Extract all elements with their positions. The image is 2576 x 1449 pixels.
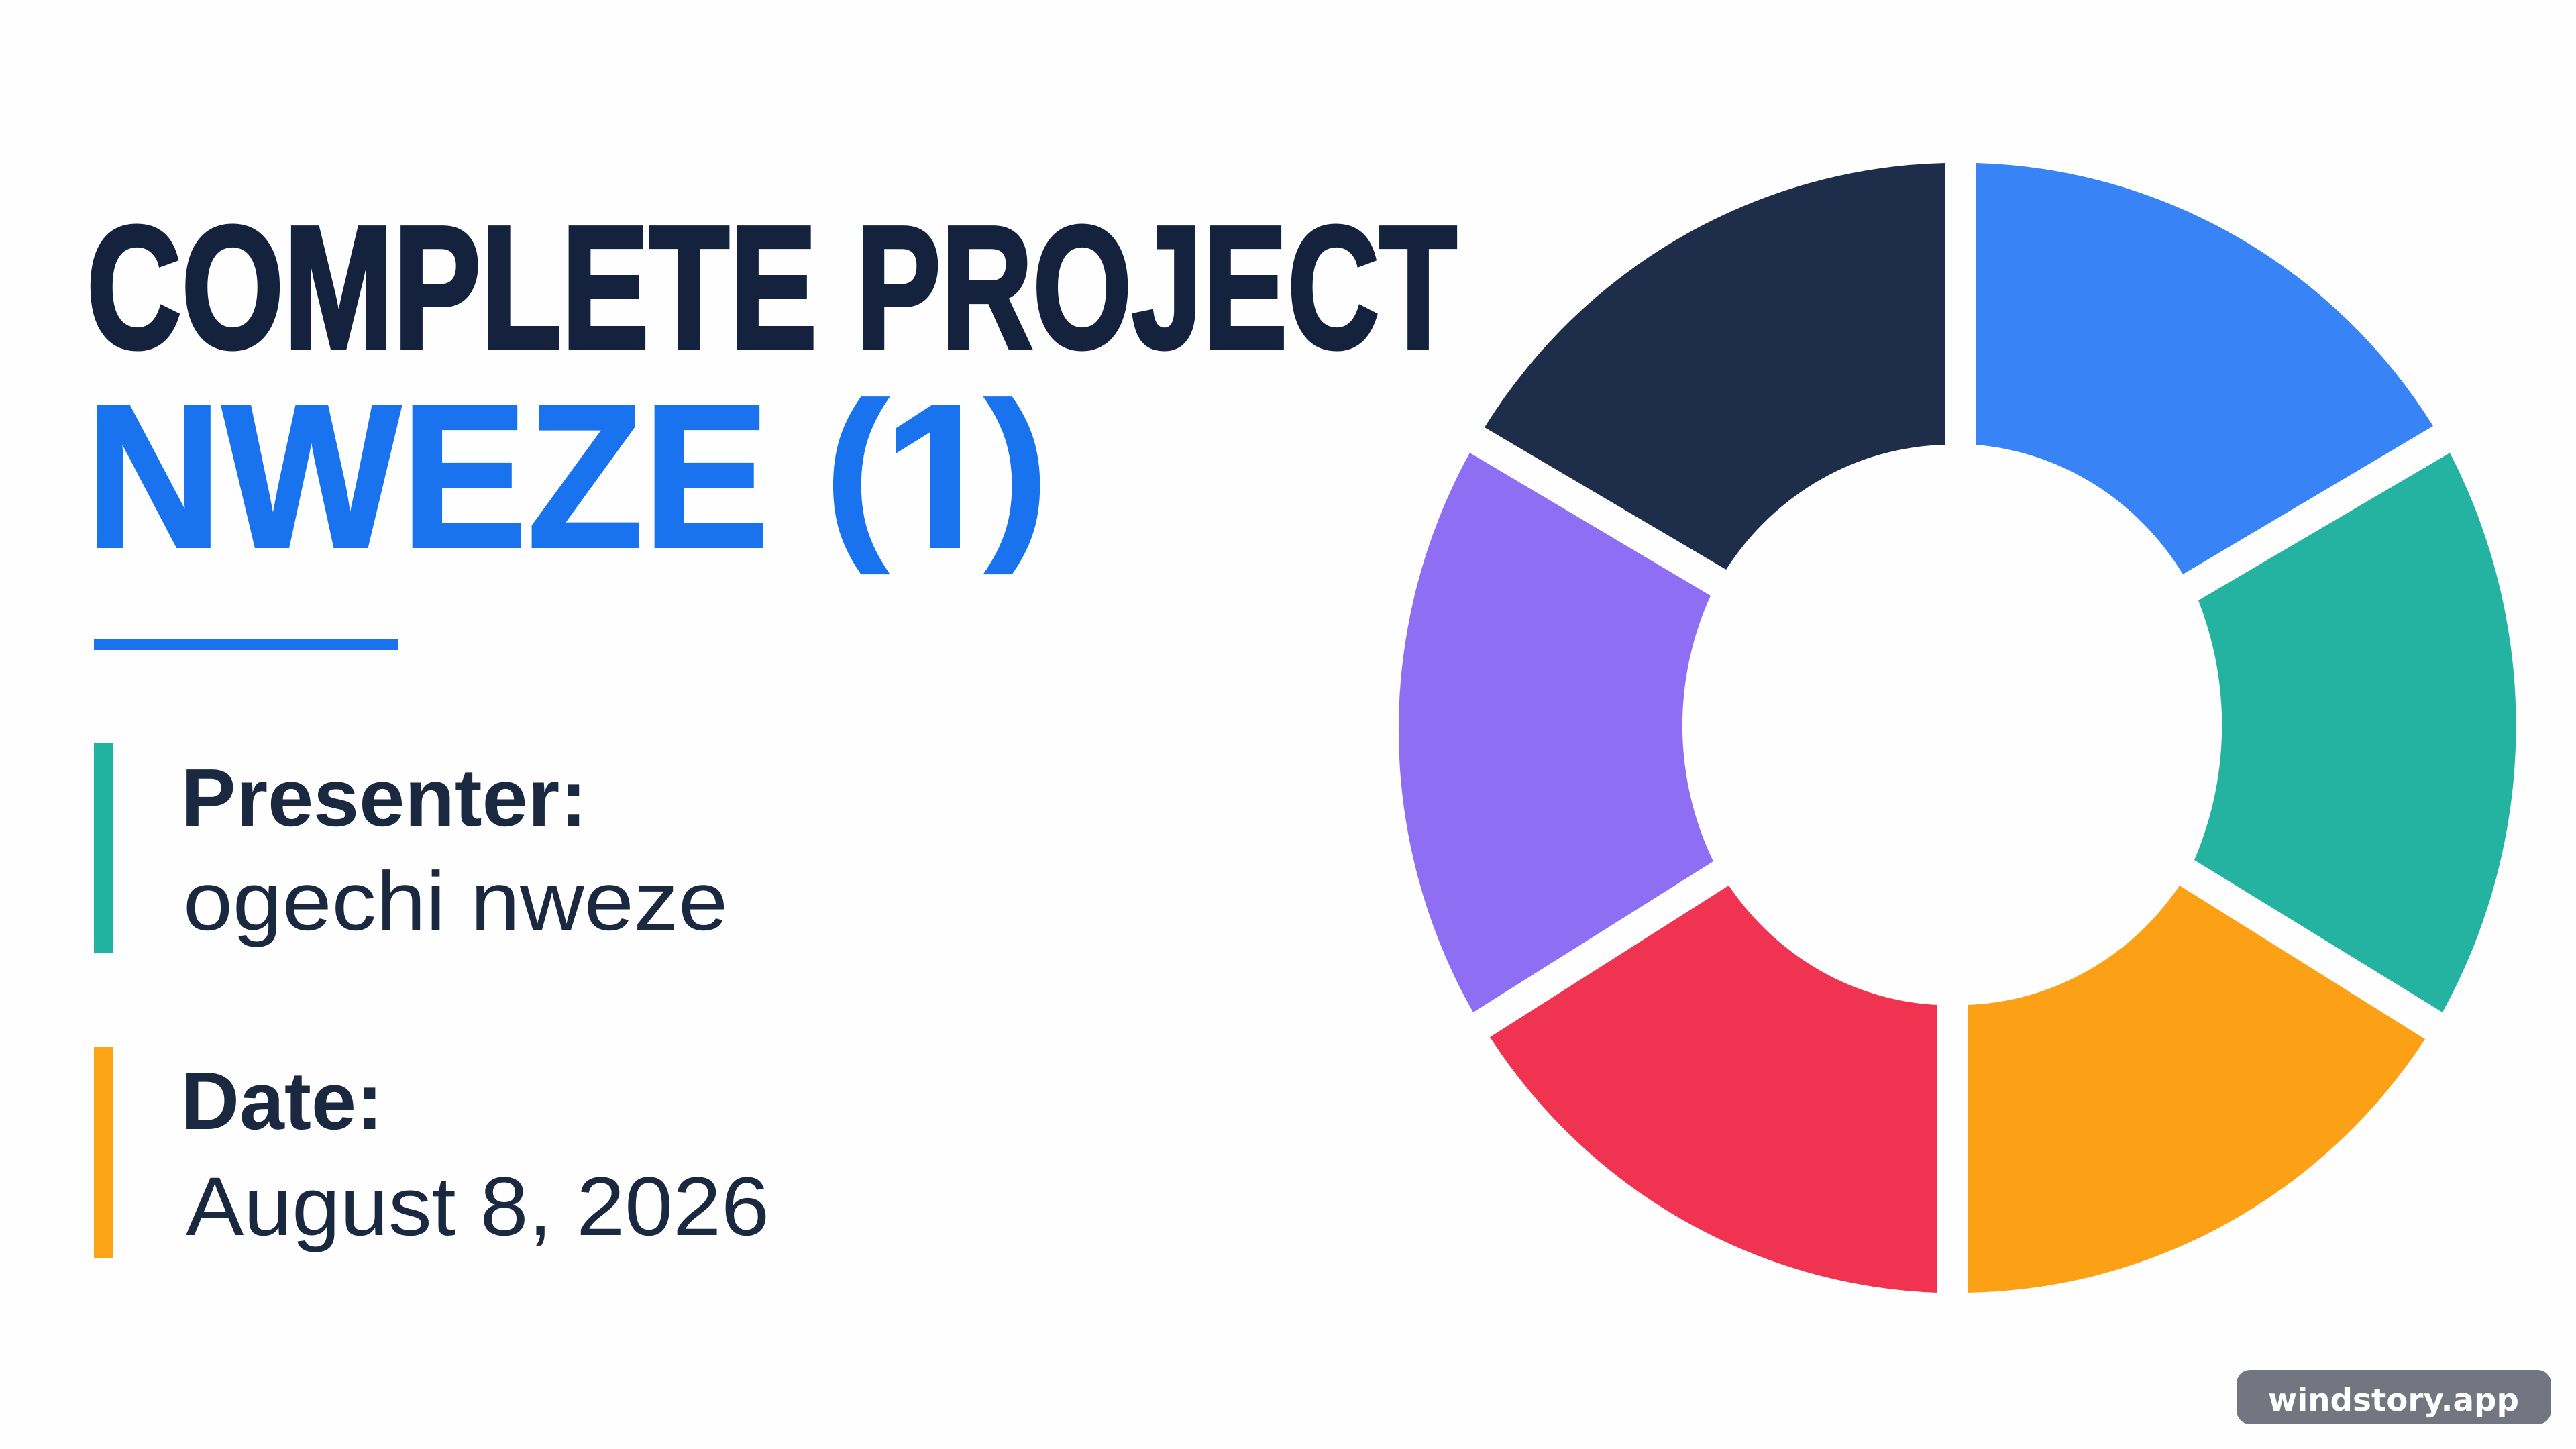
segment: orange: [1968, 885, 2425, 1293]
presenter name: ogechi nweze: [183, 855, 728, 948]
title block: [90, 224, 1457, 574]
date value: August 8, 2026: [186, 1161, 769, 1253]
presenter accent bar: [94, 743, 113, 953]
title line 2: NWEZE: [85, 362, 769, 590]
title line 2: [97, 396, 1040, 574]
segment: purple: [1399, 453, 1713, 1012]
title line 1: COMPLETE: [87, 191, 817, 385]
segment: red: [1490, 885, 1937, 1293]
title line 2: (: [825, 365, 890, 575]
presenter label: Presenter:: [181, 752, 587, 843]
title line 1: PROJECT: [856, 191, 1457, 385]
date accent bar: [94, 1047, 113, 1258]
watermark badge: [2237, 1370, 2551, 1424]
title line 2: 1: [883, 362, 998, 590]
date label: Date:: [181, 1055, 383, 1146]
date block: [94, 1047, 769, 1258]
segment: navy: [1485, 163, 1945, 570]
accent divider: [94, 639, 398, 650]
segment: blue: [1976, 163, 2433, 574]
segment: teal: [2194, 453, 2516, 1012]
donut chart: [1399, 163, 2516, 1293]
title line 2: ): [985, 365, 1048, 575]
presenter block: [94, 743, 728, 953]
badge background: [2237, 1370, 2551, 1424]
badge text: windstory.app: [2268, 1382, 2519, 1419]
